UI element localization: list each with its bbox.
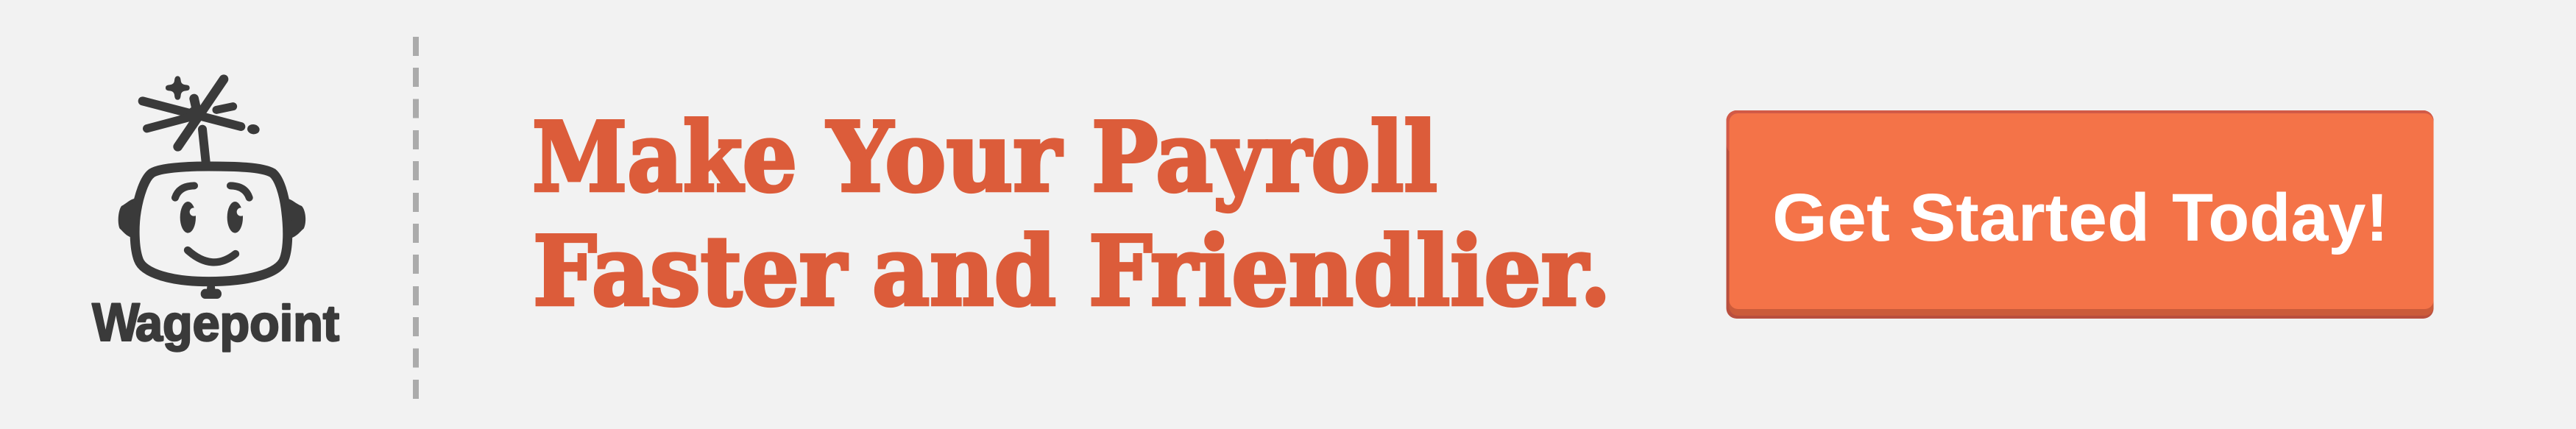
icon: stand: [201, 285, 222, 299]
icon: sparkle: [166, 76, 190, 100]
icon: propeller: [143, 79, 241, 164]
logo wordmark: agepoint: [135, 295, 339, 352]
icon: left eyebrow: [175, 185, 194, 198]
logo wordmark: W: [92, 293, 140, 352]
icon: right eye: [227, 202, 243, 233]
icon: head outline: [135, 166, 288, 282]
button top edge: [1727, 110, 2433, 155]
icon: left eye notch: [190, 208, 198, 216]
icon: propeller dot: [247, 124, 261, 135]
button label: Today!: [2172, 180, 2388, 255]
button face: [1730, 113, 2433, 309]
headline line 2: and: [872, 215, 1056, 327]
headline line 1: Your: [826, 101, 1062, 213]
headline line 2: Faster: [533, 215, 847, 327]
icon: right ear: [284, 198, 305, 239]
button label: Get: [1772, 180, 1890, 255]
headline line 2: Friendlier.: [1089, 215, 1611, 327]
button label: [1772, 180, 2388, 255]
button lower band: [1730, 221, 2433, 316]
icon: left ear: [118, 198, 138, 238]
icon: left eye: [180, 202, 196, 233]
headline line 1: [532, 101, 1437, 213]
button base: [1727, 110, 2433, 319]
headline line 1: Make: [532, 101, 797, 213]
headline line 2: [533, 215, 1611, 327]
icon: propeller hub: [187, 106, 204, 123]
icon: robot mascot: [118, 76, 305, 299]
headline: [532, 101, 1611, 327]
icon: right eye notch: [237, 208, 245, 216]
button label: Started: [1909, 180, 2150, 255]
dashed divider: [413, 37, 419, 399]
icon: smile: [188, 250, 236, 262]
icon: right eyebrow: [230, 185, 250, 198]
button: Get Started Today: [1727, 110, 2433, 319]
headline line 1: Payroll: [1091, 101, 1437, 213]
logo: Wagepoint: [92, 76, 339, 352]
